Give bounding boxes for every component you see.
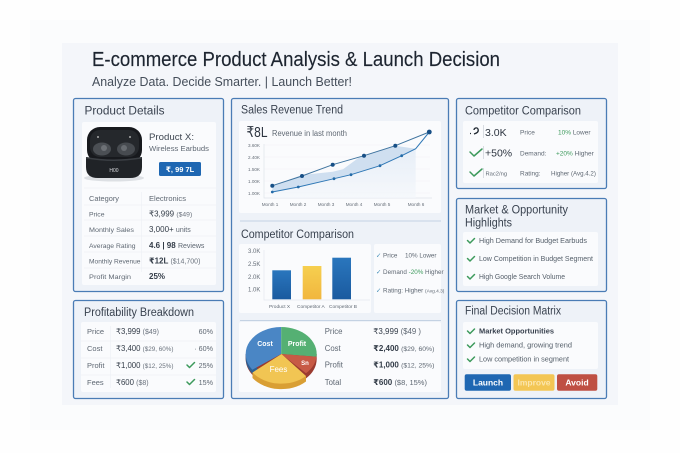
- line chart: sales revenue: 1.50K: [248, 167, 261, 172]
- heading: profitability breakdown: Profitability Breakdown: [84, 307, 194, 319]
- competitor rows: Rating:: [520, 170, 541, 178]
- button: improve: Improve: [517, 378, 551, 388]
- bar chart: competitors: [248, 249, 370, 310]
- highlights list: Low Competition in Budget Segment: [479, 254, 593, 263]
- pie chart: cost split: Sn: [301, 361, 309, 367]
- panel: centre analysis column: [232, 98, 448, 398]
- cost table: ₹600 ($8, 15%): [373, 378, 427, 387]
- profitability table: Fees: [87, 378, 104, 387]
- cost table: ₹2,400 ($29, 60%): [373, 344, 434, 353]
- bar chart: competitors: Product X: [269, 304, 291, 310]
- product data table: Average Rating: [89, 243, 136, 250]
- product data table: Electronics: [149, 194, 186, 203]
- profitability table: ₹3,999 ($49): [116, 327, 159, 336]
- product type: Wireless Earbuds: [149, 144, 209, 153]
- line chart: sales revenue: Month 5: [374, 202, 391, 207]
- product data table: Monthly Revenue: [89, 258, 141, 266]
- profitability table: ₹600 ($8): [116, 378, 149, 387]
- competitor rows: Demand:: [520, 150, 547, 158]
- bar chart: competitors: 2.0K: [248, 275, 260, 281]
- panel: profitability breakdown: [74, 300, 224, 398]
- profitability table: ₹1,000 ($12, 25%): [116, 361, 173, 370]
- competitor rows: 10% Lower: [558, 130, 591, 136]
- profitability table: 25%: [199, 361, 214, 370]
- profitability table: 60%: [199, 327, 214, 336]
- product data table: [89, 194, 205, 281]
- product data table: 25%: [149, 272, 165, 281]
- profitability table: 15%: [199, 378, 214, 387]
- bar chart: competitors: 1.0K: [248, 288, 260, 294]
- highlights list: [468, 236, 593, 281]
- profitability table: [87, 327, 214, 387]
- comparison notes: ✓ Price: [376, 252, 398, 260]
- competitor rows: Higher (Avg.4.2): [551, 170, 596, 178]
- product data table: ₹12L ($14,700): [149, 256, 200, 266]
- comparison notes: [376, 252, 445, 294]
- product data table: ₹3,999 ($49): [149, 210, 192, 218]
- line chart: sales revenue: 1.00K: [248, 191, 261, 196]
- line chart: sales revenue: 3.60K: [248, 143, 261, 148]
- product data table: Category: [89, 194, 119, 203]
- comparison notes: 10% Lower: [405, 252, 437, 260]
- button: improve: [514, 374, 554, 391]
- heading: sales revenue trend: Sales Revenue Trend: [241, 104, 343, 116]
- competitor rows: Rac2/ng: [486, 172, 507, 178]
- profitability table: ₹3,400 ($29, 60%): [116, 344, 173, 353]
- heading: product details: Product Details: [84, 106, 165, 118]
- cost table: Profit: [325, 360, 344, 370]
- heading: competitor comparison chart: Competitor Comparison: [241, 229, 354, 241]
- profitability table: Profit: [87, 361, 105, 370]
- pie chart: cost split: Fees: [270, 365, 287, 374]
- bar chart: competitors: Competitor B: [329, 304, 357, 310]
- icon: earbuds in charging case: H00: [109, 168, 119, 174]
- profitability table: Price: [87, 327, 104, 336]
- bar chart: competitors: 2.5K: [248, 262, 260, 268]
- pie chart: cost split: [246, 327, 317, 389]
- comparison notes: ✓ Demand -20% Higher: [376, 269, 444, 276]
- line chart: sales revenue: Month 3: [318, 202, 335, 207]
- competitor rows: +20% Higher: [556, 150, 595, 158]
- product data table: Profit Margin: [89, 274, 131, 281]
- pie chart: cost split: Profit: [288, 341, 307, 348]
- line chart: sales revenue: Month 6: [408, 202, 425, 207]
- product data table: 4.6 | 98 Reviews: [149, 241, 205, 250]
- product name: Product X:: [149, 132, 194, 143]
- cost table: ₹3,999 ($49 ): [373, 327, 421, 336]
- button: launch: [465, 374, 511, 391]
- line chart: sales revenue: Month 1: [262, 202, 279, 207]
- competitor rows: 3.0K: [485, 127, 507, 139]
- profitability table: · 60%: [194, 344, 214, 353]
- product data table: Price: [89, 212, 105, 218]
- cost table: [325, 327, 434, 387]
- competitor rows: +50%: [485, 148, 512, 160]
- line chart: sales revenue: Month 2: [290, 202, 307, 207]
- line chart: sales revenue: Month 4: [346, 202, 363, 207]
- pie chart: cost split: Cost: [257, 341, 273, 348]
- competitor rows: Price: [520, 130, 535, 136]
- heading: competitor comparison: Competitor Comparison: [465, 106, 581, 118]
- bar chart: competitors: 3.0K: [248, 249, 260, 255]
- product data table: 3,000+ units: [149, 225, 191, 234]
- cost table: Total: [325, 378, 341, 387]
- cost table: Price: [325, 327, 342, 336]
- profitability table: Cost: [87, 344, 103, 353]
- panel: product details: [74, 98, 224, 292]
- highlights list: High Demand for Budget Earbuds: [479, 236, 587, 245]
- heading: market and opportunity: Market & Opportunity: [465, 204, 568, 216]
- heading: final decision matrix: Final Decision Matrix: [465, 306, 561, 318]
- line chart: sales revenue: 2.40K: [248, 155, 261, 160]
- bar chart: competitors: Competitor A: [297, 304, 326, 310]
- title: E-commerce Product Analysis & Launch Decision: [92, 49, 500, 71]
- cost table: Cost: [325, 344, 342, 353]
- heading: highlights: Highlights: [465, 218, 512, 230]
- competitor rows: [470, 125, 596, 178]
- button: launch: Launch: [473, 378, 503, 388]
- price badge: [159, 162, 201, 176]
- subtitle: Analyze Data. Decide Smarter. | Launch Better!: [92, 74, 352, 89]
- decision checklist: High demand, growing trend: [479, 340, 572, 350]
- cost table: ₹1,000 ($12, 25%): [373, 360, 434, 370]
- panel: competitor comparison: [456, 98, 606, 188]
- icon: earbuds in charging case: [84, 127, 144, 182]
- panel: market and opportunity highlights: [456, 198, 606, 292]
- decision checklist: Market Opportunities: [479, 326, 554, 336]
- decision checklist: Low competition in segment: [479, 354, 569, 364]
- revenue figure: ₹8L: [246, 124, 268, 141]
- price badge: ₹, 99 7L: [166, 165, 195, 174]
- line chart: sales revenue: 1.00K: [248, 179, 261, 184]
- comparison notes: ✓ Rating: Higher (Avg.4.3): [376, 288, 445, 294]
- button: avoid: [557, 374, 597, 391]
- product data table: Monthly Sales: [89, 227, 135, 234]
- line chart: sales revenue: [248, 130, 432, 207]
- button: avoid: Avoid: [565, 378, 589, 388]
- decision checklist: [468, 326, 572, 364]
- panel: final decision matrix: [456, 300, 606, 398]
- highlights list: High Google Search Volume: [479, 272, 565, 281]
- revenue caption: Revenue in last month: [272, 129, 347, 138]
